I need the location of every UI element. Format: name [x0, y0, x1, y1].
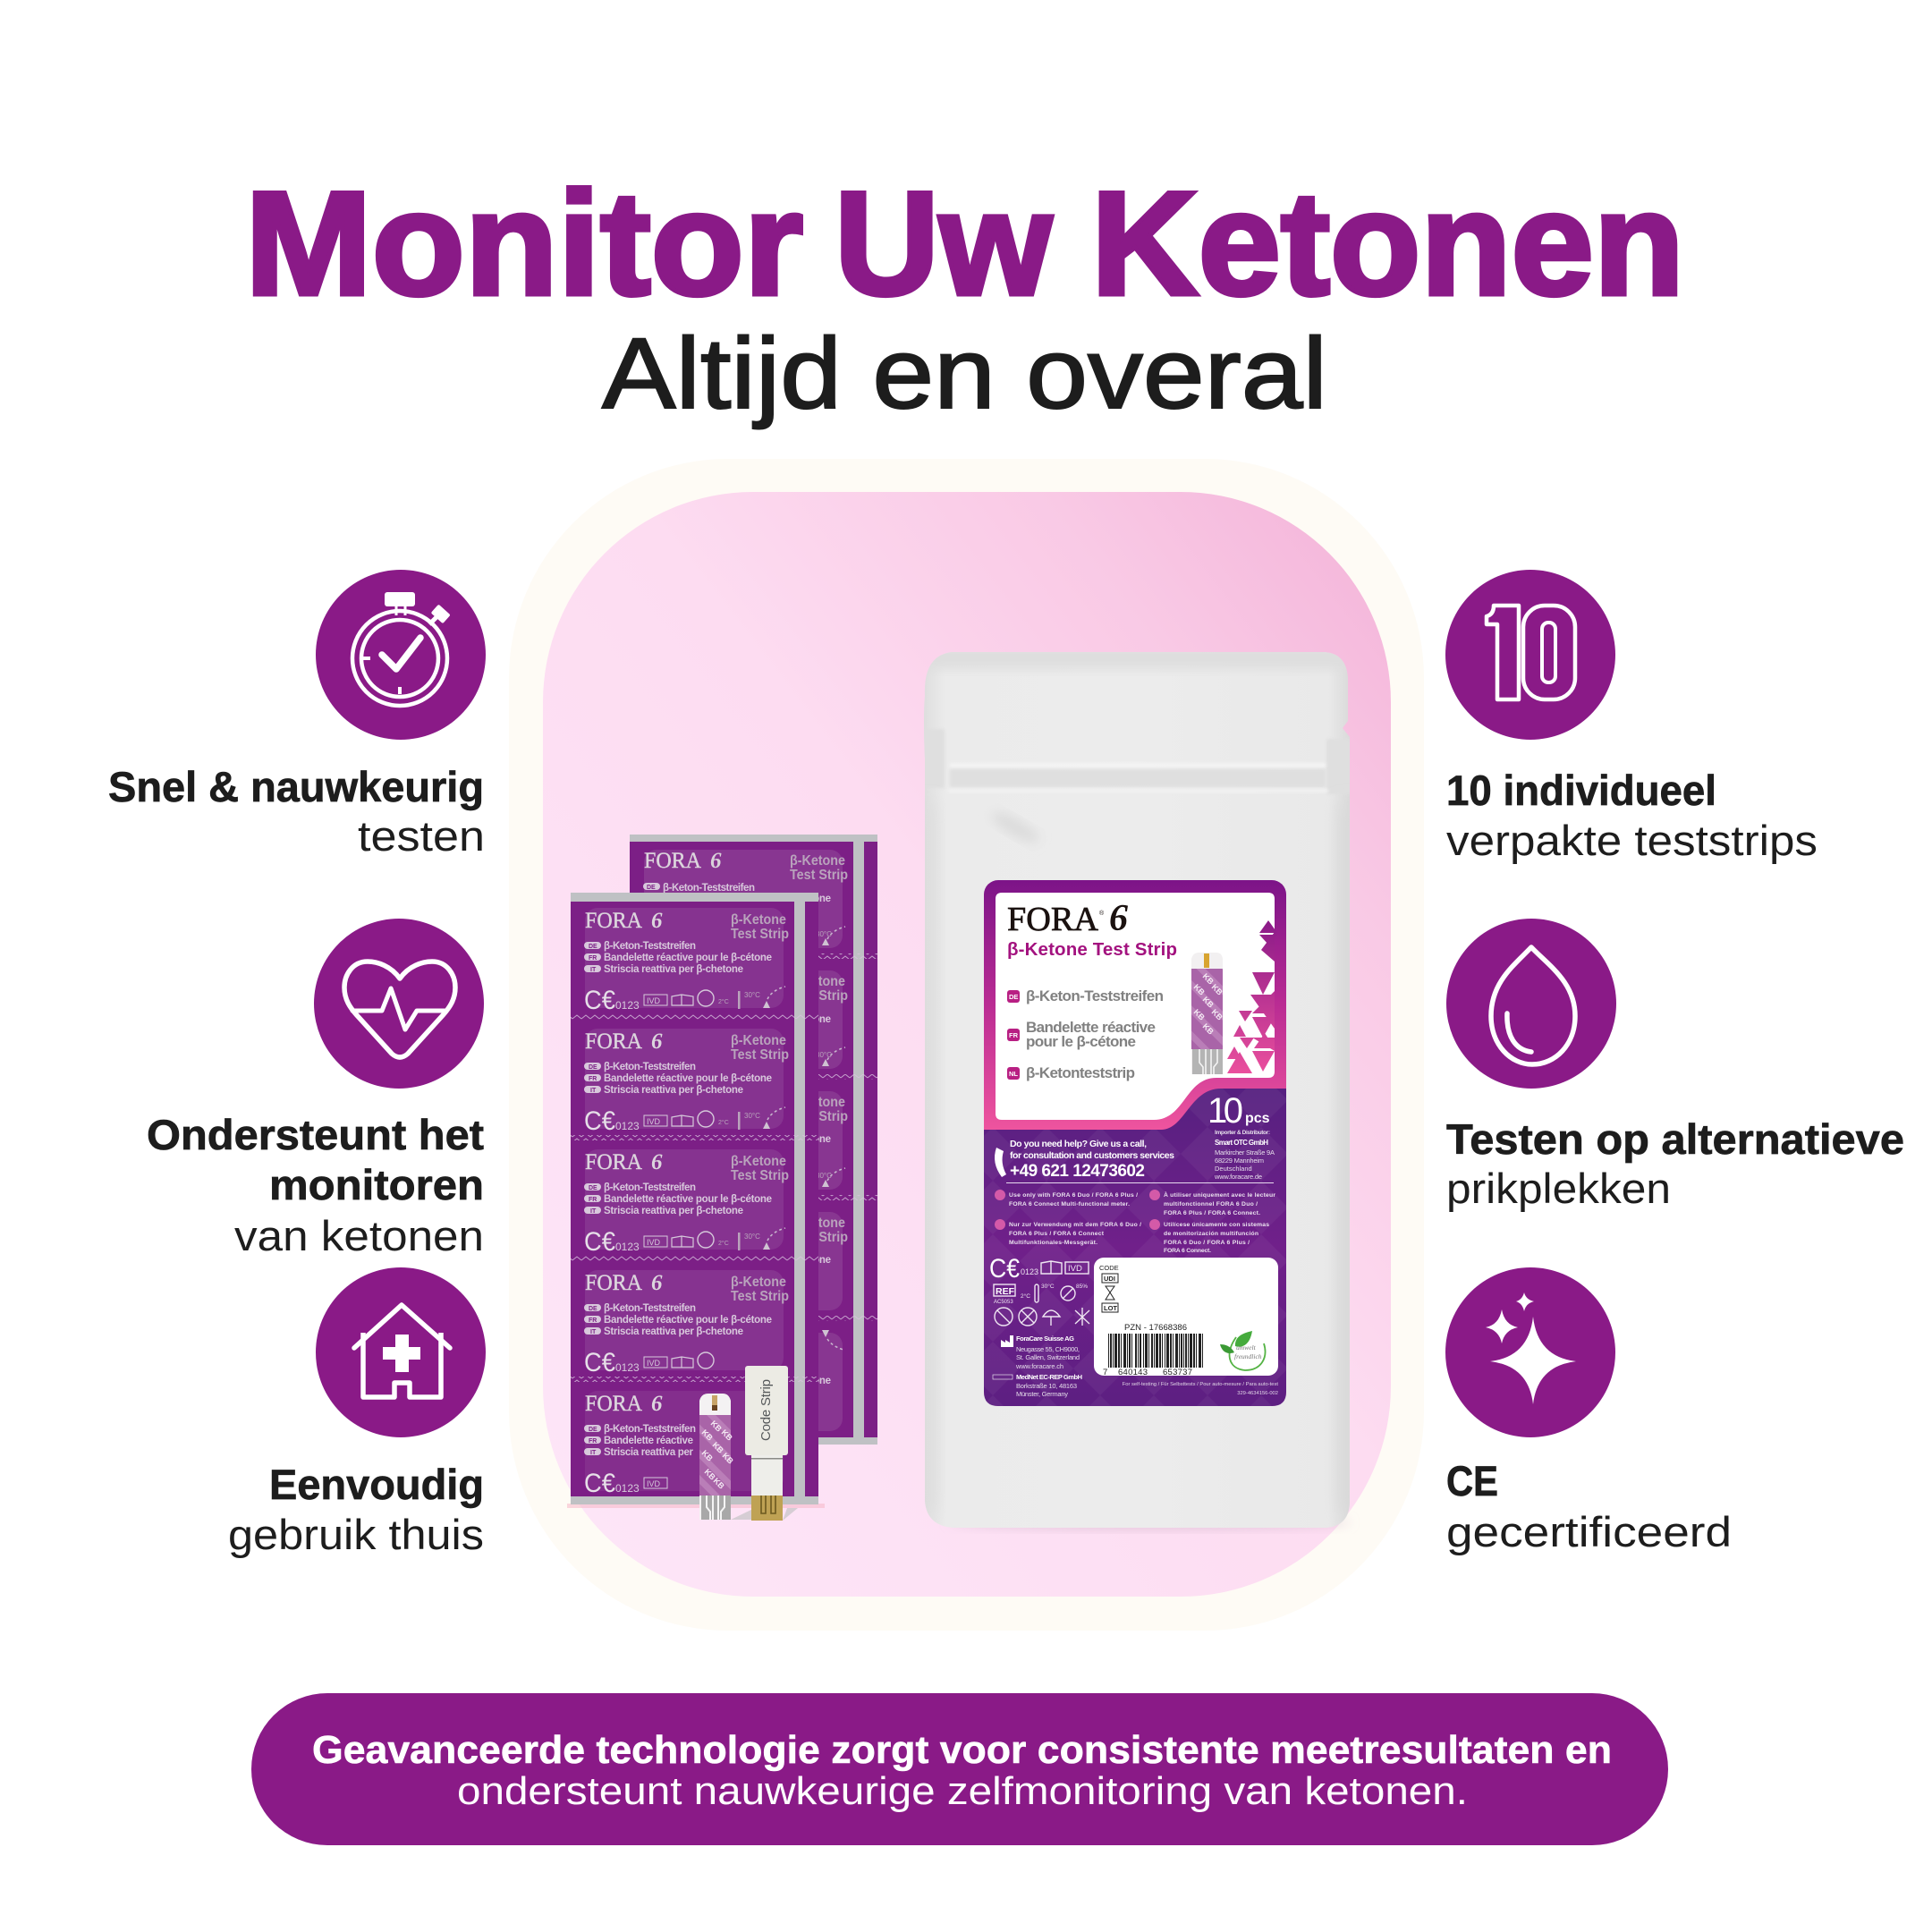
title: Ketonen: [1091, 161, 1684, 326]
label: manufacturer: MedNet EC-REP GmbH: [1016, 1373, 1082, 1381]
icon: heart with pulse: [314, 919, 484, 1089]
label: importer: Smart OTC GmbH: [1215, 1139, 1268, 1147]
strip panel 5: FORA: [585, 1392, 642, 1416]
label: eco logo: freundlich: [1234, 1352, 1262, 1360]
product: single test strip: KB: [720, 1428, 734, 1443]
callout: bottom banner: ondersteunt nauwkeurige zelfmonitoring van ketonen.: [457, 1769, 1468, 1813]
strip panel 4: IT: [590, 1329, 597, 1335]
back sheet: β-Ketone: [790, 853, 845, 869]
strip panel 2: IT: [590, 1088, 597, 1094]
label: language list: Bandelette réactive: [1026, 1019, 1156, 1036]
back sheet: FORA: [644, 849, 701, 873]
label: manufacturer: Münster, Germany: [1016, 1390, 1068, 1398]
strip panel 5: IVD: [647, 1479, 661, 1488]
strip panel 5: [584, 1391, 784, 1498]
label: importer: Deutschland: [1215, 1165, 1252, 1173]
back sheet: [630, 835, 877, 1445]
strip panel 5: β-Keton-Teststreifen: [604, 1424, 696, 1435]
description: testen: [358, 812, 485, 860]
pouch label: [984, 880, 1286, 1406]
strip panel 1: C€: [584, 986, 615, 1015]
strip panel 4: C€: [584, 1348, 615, 1377]
label: language list: pour le β-cétone: [1026, 1033, 1136, 1050]
strip panel 4: FR: [589, 1318, 597, 1324]
feature: quick and accurate: [108, 570, 486, 860]
label: triangles: [1227, 920, 1277, 1073]
strip panel 1: β-Ketone: [731, 912, 786, 928]
icon: house with cross: [316, 1267, 486, 1437]
strip panel 4: Striscia reattiva per β-chetone: [604, 1326, 743, 1337]
strip panel 3: 2°C: [718, 1240, 729, 1247]
floor shadow: [567, 1504, 825, 1508]
strip panel 3: β-Ketone: [731, 1154, 786, 1169]
strip panel 5: 0123: [615, 1482, 640, 1495]
feature: alternative sites: [1446, 919, 1904, 1212]
strip panel 2: DE: [589, 1064, 597, 1071]
label: manufacturer: Borkstraße 10, 48163: [1016, 1382, 1077, 1390]
feature: home use: [228, 1267, 486, 1558]
back sheet: β-Ketone: [790, 974, 845, 989]
label: importer: Importer & Distributor:: [1215, 1130, 1270, 1136]
strip panel 1: DE: [589, 944, 597, 950]
label: footer: For self-testing / Für Selbsttests / Pour auto-mesure / Para auto-test: [1123, 1382, 1278, 1387]
label: white panel: [996, 893, 1275, 1120]
strip panel 2: β-Ketone: [731, 1033, 786, 1048]
label: barcode panel: [1094, 1258, 1278, 1377]
label: importer: [1214, 1130, 1275, 1181]
strip panel 2: Striscia reattiva per β-chetone: [604, 1085, 743, 1096]
strip panel 4: β-Keton-Teststreifen: [604, 1303, 696, 1314]
strip panel 4: 0123: [615, 1361, 640, 1374]
label: regulatory symbols: C€: [989, 1254, 1020, 1284]
strip panel 1: 0123: [615, 999, 640, 1012]
feature: CE certified: [1445, 1267, 1732, 1555]
back sheet: 30°C: [816, 1172, 832, 1180]
label: barcode panel: 653737: [1163, 1368, 1192, 1377]
icon: sparkles: [1445, 1267, 1615, 1437]
label: manufacturer: St. Gallen, Switzerland: [1016, 1353, 1080, 1361]
product: single test strip: KB: [711, 1440, 725, 1455]
strip panel 5: IT: [590, 1450, 597, 1456]
label: mini test strip: KB: [1201, 1021, 1216, 1037]
strip panel 2: Bandelette réactive pour le β-cétone: [604, 1073, 772, 1084]
back sheet: β-Ketone: [790, 1216, 845, 1231]
strip panel 3: 0123: [615, 1241, 640, 1253]
strip panel 2: 6: [651, 1030, 663, 1054]
strip panel 3: FR: [589, 1197, 597, 1203]
strip panel 3: C€: [584, 1227, 615, 1257]
description: van ketonen: [234, 1212, 484, 1259]
label: logo: FORA: [1007, 901, 1099, 938]
label: footer: [1123, 1382, 1278, 1396]
label: manufacturer: [993, 1335, 1082, 1398]
label: regulatory symbols: 2°C: [1021, 1292, 1030, 1300]
heading: Testen op alternatieve: [1446, 1115, 1904, 1163]
label: usage notes: FORA 6 Duo / FORA 6 Plus /: [1164, 1240, 1250, 1246]
back sheet: DE: [647, 885, 656, 891]
label: barcode panel: UDI: [1104, 1275, 1115, 1283]
strip panel 2: 2°C: [718, 1119, 729, 1126]
strip panel 2: 0123: [615, 1120, 640, 1132]
label: footer: 329-4634156-002: [1237, 1391, 1278, 1396]
label: usage notes: FORA 6 Connect.: [1164, 1248, 1211, 1254]
strip panel 1: IT: [590, 967, 597, 973]
strip panel 1: [584, 908, 789, 1015]
strip panel 2: β-Keton-Teststreifen: [604, 1062, 696, 1072]
label: manufacturer: Neugasse 55, CH9000,: [1016, 1345, 1080, 1353]
label: mini test strip: KB: [1210, 982, 1224, 997]
product: single test strip: [699, 1394, 757, 1520]
description: gebruik thuis: [228, 1511, 484, 1558]
label: usage notes: FORA 6 Plus / FORA 6 Connect.: [1164, 1210, 1260, 1216]
strip panel 3: IT: [590, 1208, 597, 1215]
label: language list: [1007, 987, 1164, 1081]
strip panel 5: C€: [584, 1469, 615, 1498]
strip panel 1: 6: [651, 909, 663, 933]
strip panel 3: FORA: [585, 1150, 642, 1174]
strip panel 2: 30°C: [744, 1112, 760, 1120]
panel: product background: [509, 459, 1424, 1631]
label: regulatory symbols: IVD: [1068, 1264, 1082, 1274]
label: manufacturer: www.foracare.ch: [1015, 1362, 1063, 1370]
back sheet: β-Ketone: [790, 1095, 845, 1110]
label: regulatory symbols: [989, 1254, 1089, 1326]
back sheet: β-Keton-Teststreifen: [663, 883, 755, 894]
strip panel 4: IVD: [647, 1359, 661, 1368]
strip panel 3: IVD: [647, 1238, 661, 1247]
feature: ketone monitoring: monitoren: [269, 1161, 484, 1208]
label: usage notes: [995, 1190, 1275, 1254]
icon: number ten: [1445, 570, 1615, 740]
front sheet: [571, 893, 818, 1504]
label: mini test strip: KB: [1192, 982, 1207, 997]
strip panel 5: FR: [589, 1438, 597, 1445]
back sheet: Bandelette réactive pour le β-cétone: [663, 1014, 831, 1025]
title: [245, 161, 1684, 326]
strip panel 5: DE: [589, 1427, 597, 1433]
heading: Eenvoudig: [269, 1461, 484, 1508]
product: single test strip: KB: [712, 1476, 726, 1491]
strip panel 4: [584, 1270, 789, 1377]
strip panel 2: FR: [589, 1076, 597, 1082]
back sheet: Bandelette réactive pour le β-cétone: [663, 1376, 831, 1386]
pouch label: β-Ketone Test Strip: [1007, 939, 1177, 960]
label: barcode panel: 640143: [1118, 1368, 1148, 1377]
pouch label: ®: [1099, 910, 1105, 917]
strip panel 1: 2°C: [718, 998, 729, 1005]
strip panel 4: Bandelette réactive pour le β-cétone: [604, 1315, 772, 1326]
back sheet: Test Strip: [790, 988, 848, 1004]
title: Monitor: [245, 161, 803, 326]
pouch label: 6: [1109, 898, 1128, 939]
callout: bottom banner: Geavanceerde technologie zorgt voor consistente meetresultaten en: [312, 1728, 1612, 1772]
label: manufacturer: ForaCare Suisse AG: [1016, 1335, 1074, 1343]
strip panel 3: Bandelette réactive pour le β-cétone: [604, 1194, 772, 1205]
back sheet: 30°C: [816, 930, 832, 938]
strip panel 1: IVD: [647, 996, 661, 1005]
product: single test strip: KB: [703, 1467, 717, 1482]
product: single test strip: KB: [700, 1428, 715, 1443]
label: usage notes: Nur zur Verwendung mit dem FORA 6 Duo /: [1009, 1222, 1141, 1228]
label: regulatory symbols: REF: [996, 1286, 1015, 1297]
back sheet: Bandelette réactive pour le β-cétone: [663, 1255, 831, 1266]
label: eco logo: umwelt: [1236, 1343, 1257, 1352]
product: test strip sheets: [567, 835, 877, 1508]
label: regulatory symbols: 30°C: [1041, 1283, 1055, 1290]
label: usage notes: Utilícese únicamente con sistemas: [1164, 1222, 1269, 1228]
strip panel 4: DE: [589, 1306, 597, 1312]
label: mini test strip: KB: [1192, 1007, 1207, 1022]
back sheet: Bandelette réactive pour le β-cétone: [663, 1134, 831, 1145]
label: regulatory symbols: 85%: [1076, 1284, 1088, 1290]
product: foil pouch: [921, 646, 1356, 1530]
icon: stopwatch: [316, 570, 486, 740]
label: barcode panel: LOT: [1104, 1304, 1117, 1312]
strip panel 3: β-Keton-Teststreifen: [604, 1182, 696, 1193]
label: usage notes: de monitorización multifunción: [1164, 1231, 1258, 1237]
strip panel 4: FORA: [585, 1271, 642, 1295]
product: code strip: Code Strip: [758, 1379, 774, 1441]
strip panel 2: IVD: [647, 1117, 661, 1126]
strip panel 4: 6: [651, 1271, 663, 1295]
label: eco logo: [1220, 1331, 1265, 1370]
label: importer: Markircher Straße 9A: [1215, 1148, 1275, 1157]
strip panel 2: Test Strip: [731, 1047, 789, 1063]
label: language list: NL: [1009, 1070, 1018, 1078]
back sheet: Test Strip: [790, 1109, 848, 1124]
label: importer: www.foracare.de: [1214, 1173, 1262, 1181]
label: usage notes: Use only with FORA 6 Duo / FORA 6 Plus /: [1009, 1192, 1138, 1199]
back sheet: Test Strip: [790, 868, 848, 883]
strip panel 4: β-Ketone: [731, 1275, 786, 1290]
subtitle: Altijd en overal: [602, 318, 1327, 429]
product: single test strip: KB: [721, 1451, 735, 1466]
heading: CE: [1446, 1457, 1498, 1504]
strip panel 4: Test Strip: [731, 1289, 789, 1304]
description: gecertificeerd: [1446, 1508, 1732, 1555]
strip panel 1: FORA: [585, 909, 642, 933]
label: usage notes: FORA 6 Plus / FORA 6 Connect: [1009, 1231, 1105, 1237]
description: verpakte teststrips: [1446, 817, 1818, 864]
label: mini test strip: [1191, 953, 1224, 1074]
callout: bottom banner: [251, 1693, 1668, 1845]
label: usage notes: Multifunktionales-Messgerät.: [1009, 1240, 1097, 1246]
strip panel 1: β-Keton-Teststreifen: [604, 941, 696, 952]
feature: ketone monitoring: [147, 919, 484, 1259]
heading: Ondersteunt het: [147, 1111, 484, 1158]
label: usage notes: FORA 6 Connect Multi-functional meter.: [1009, 1201, 1130, 1208]
strip panel 1: Test Strip: [731, 927, 789, 942]
label: mini test strip: KB: [1210, 1007, 1224, 1022]
strip panel 1: Striscia reattiva per β-chetone: [604, 964, 743, 975]
back sheet: Bandelette réactive pour le β-cétone: [663, 894, 831, 904]
strip panel 3: DE: [589, 1185, 597, 1191]
heading: 10 individueel: [1446, 767, 1716, 814]
back sheet: 6: [710, 849, 722, 873]
description: prikplekken: [1446, 1165, 1671, 1212]
strip panel 1: 30°C: [744, 991, 760, 999]
product: single test strip: KB: [700, 1448, 715, 1463]
product: single test strip: KB: [709, 1419, 724, 1434]
heading: Snel & nauwkeurig: [108, 763, 484, 810]
label: dark lower section: [984, 1089, 1286, 1406]
back sheet: 30°C: [816, 1051, 832, 1059]
label: language list: FR: [1009, 1031, 1019, 1039]
label: regulatory symbols: 0123: [1021, 1267, 1038, 1276]
label: barcode panel: PZN - 17668386: [1124, 1323, 1187, 1333]
label: importer: 68229 Mannheim: [1215, 1157, 1264, 1165]
strip panel 3: Test Strip: [731, 1168, 789, 1183]
label: usage notes: multifonctionnel FORA 6 Duo /: [1164, 1201, 1258, 1208]
strip panel 1: Bandelette réactive pour le β-cétone: [604, 953, 772, 963]
strip panel 1: FR: [589, 955, 597, 962]
strip panel 3: [584, 1149, 789, 1257]
label: contact: for consultation and customers services: [1010, 1150, 1174, 1161]
icon: drop: [1446, 919, 1616, 1089]
strip panel 5: Bandelette réactive: [604, 1436, 693, 1446]
label: mini test strip: KB: [1201, 995, 1216, 1010]
label: contact: Do you need help? Give us a call,: [1010, 1139, 1147, 1149]
label: usage notes: À utiliser uniquement avec le lecteur: [1164, 1191, 1275, 1199]
strip panel 2: [584, 1029, 789, 1136]
strip panel 5: Striscia reattiva per: [604, 1447, 694, 1458]
strip panel 3: 6: [651, 1150, 663, 1174]
label: contact: [995, 1139, 1274, 1183]
label: language list: β-Ketonteststrip: [1026, 1064, 1135, 1081]
label: language list: DE: [1009, 993, 1018, 1001]
label: regulatory symbols: AC5053: [994, 1300, 1013, 1305]
strip panel 3: Striscia reattiva per β-chetone: [604, 1206, 743, 1216]
product: code strip: [745, 1366, 798, 1521]
label: barcode panel: 7: [1103, 1368, 1107, 1377]
feature: ten strips: [1445, 570, 1818, 864]
label: language list: β-Keton-Teststreifen: [1026, 987, 1164, 1004]
strip panel 2: FORA: [585, 1030, 642, 1054]
strip panel 3: 30°C: [744, 1233, 760, 1241]
title: Uw: [835, 161, 1053, 326]
pouch label: pcs: [1245, 1111, 1270, 1126]
label: mini test strip: KB: [1201, 971, 1216, 987]
strip panel 2: C€: [584, 1106, 615, 1136]
label: count: 10: [1208, 1091, 1243, 1131]
strip panel 5: 6: [651, 1392, 663, 1416]
label: barcode panel: CODE: [1099, 1264, 1119, 1272]
label: contact: +49 621 12473602: [1010, 1162, 1145, 1181]
back sheet: Test Strip: [790, 1230, 848, 1245]
